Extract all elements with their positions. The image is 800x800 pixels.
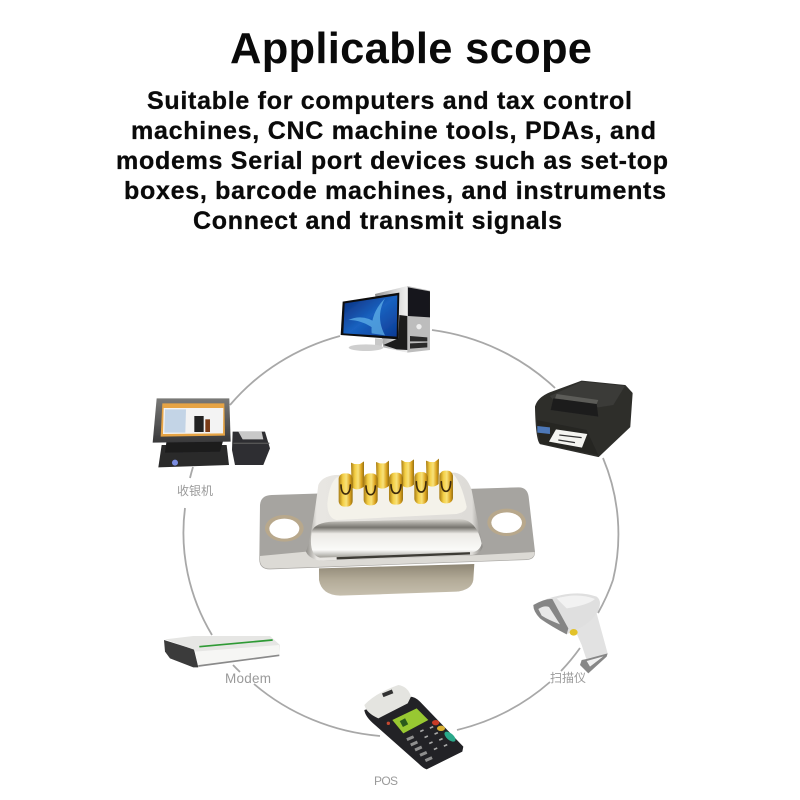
label: POS: POS: [374, 774, 398, 788]
icon: label printer: [536, 382, 632, 456]
keypad: [406, 735, 433, 762]
connector flange: [259, 487, 535, 569]
connector lower body: [319, 564, 474, 596]
receipt printer: [232, 432, 270, 465]
label: Modem: Modem: [225, 671, 271, 686]
icon: cash register: [153, 398, 270, 467]
icon: modem: [164, 636, 280, 667]
connecting ring: [183, 330, 618, 736]
scanner foot: [580, 653, 608, 673]
status light strip: [199, 640, 273, 647]
function buttons: [432, 720, 457, 743]
mounting hole left: [265, 515, 304, 542]
white insulator: [327, 474, 467, 520]
description text block: [116, 87, 668, 235]
shell shadow line: [337, 553, 470, 558]
description text block: Connect and transmit signals: [193, 207, 562, 235]
icon: barcode scanner: [533, 593, 608, 673]
scanner head: [533, 593, 600, 634]
blue badge: [537, 426, 550, 434]
printer body: [536, 382, 632, 456]
scanner trigger: [570, 629, 578, 636]
printer lid: [550, 382, 625, 407]
tower side: [375, 286, 407, 353]
tower front: [407, 286, 430, 353]
label: cash register: 收银机: [177, 484, 213, 498]
shell band: [311, 519, 482, 558]
description text block: boxes, barcode machines, and instruments: [124, 177, 666, 205]
terminal screen: [392, 708, 428, 733]
paper label: [549, 429, 587, 448]
icon: D-sub 9-pin connector: [259, 459, 535, 596]
icon: desktop computer: [341, 286, 430, 353]
label: scanner: 扫描仪: [550, 671, 586, 685]
connector shell: [306, 473, 483, 561]
scanner nose: [533, 599, 568, 634]
title: Applicable scope: [230, 25, 592, 73]
monitor: [341, 293, 399, 339]
modem side: [164, 640, 198, 667]
status lights: [387, 722, 390, 725]
front row pins: [339, 471, 453, 507]
scanner handle: [575, 613, 608, 660]
flange lip: [260, 552, 535, 569]
pin collars: [341, 482, 451, 495]
description text block: Suitable for computers and tax control: [147, 87, 632, 115]
description text block: modems Serial port devices such as set-top: [116, 147, 668, 175]
monitor stand: [375, 338, 383, 347]
mounting hole right: [487, 509, 526, 536]
modem top: [165, 636, 280, 666]
terminal body: [364, 697, 463, 769]
back row pins: [351, 459, 439, 489]
receipt head: [364, 685, 411, 718]
icon: POS terminal: [364, 685, 463, 769]
description text block: machines, CNC machine tools, PDAs, and: [131, 117, 656, 145]
register screen: [153, 398, 231, 443]
register base: [158, 445, 229, 467]
